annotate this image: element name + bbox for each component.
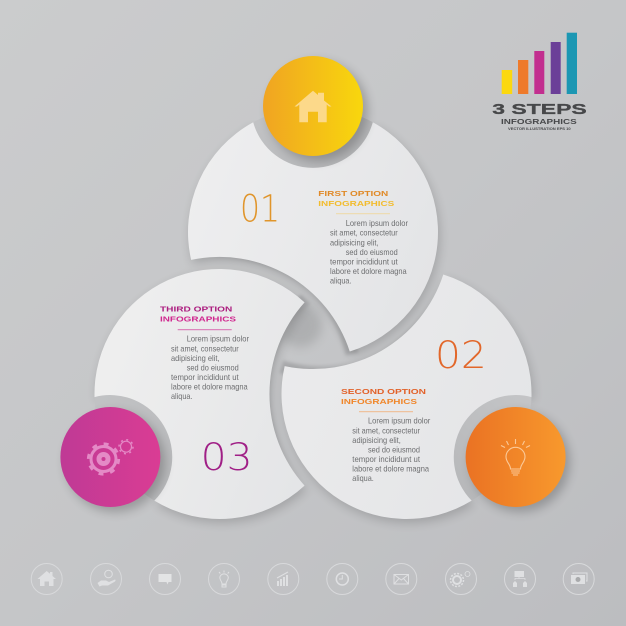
body text: tempor incididunt ut xyxy=(352,455,421,464)
orange circle with light bulb icon xyxy=(466,407,566,507)
heading xyxy=(318,189,394,208)
body text: Lorem ipsum dolor xyxy=(368,417,431,426)
number 02: 02 xyxy=(435,334,487,377)
yellow circle with home icon xyxy=(263,56,363,156)
body text: labore et dolore magna xyxy=(352,465,429,474)
heading: SECOND OPTION xyxy=(341,387,426,396)
divider xyxy=(336,213,390,214)
icon: envelope xyxy=(386,564,417,594)
heading xyxy=(160,305,236,324)
icon: banknotes xyxy=(563,564,594,594)
segment drop shadows xyxy=(64,126,566,561)
icon: home xyxy=(31,564,62,594)
logo: 3 steps xyxy=(492,33,587,131)
notch shading xyxy=(97,395,168,500)
logo subtitle: INFOGRAPHICS xyxy=(501,117,577,126)
body text: sit amet, consectetur xyxy=(330,229,398,238)
centre shading xyxy=(278,303,322,347)
body text xyxy=(330,219,408,286)
circle shadows xyxy=(65,61,570,512)
body text: tempor incididunt ut xyxy=(330,258,398,266)
body text: sed do eiusmod xyxy=(346,248,398,257)
icon: light bulb xyxy=(208,564,240,594)
icon: home xyxy=(294,91,332,122)
body text: aliqua. xyxy=(330,276,352,286)
divider xyxy=(178,329,232,330)
body text: labore et dolore magna xyxy=(330,267,407,276)
heading: INFOGRAPHICS xyxy=(160,315,236,324)
icon: light bulb xyxy=(501,439,530,475)
notch shading xyxy=(258,117,372,168)
body text: adipisicing elit, xyxy=(330,238,378,247)
icon: hand with coin xyxy=(90,564,122,594)
body text xyxy=(171,335,249,401)
body text: aliqua. xyxy=(352,474,374,483)
body text: labore et dolore magna xyxy=(171,383,248,392)
icon: rising chart xyxy=(268,564,299,594)
logo title: 3 STEPS xyxy=(492,101,587,118)
icon: gears xyxy=(446,564,476,594)
body text: sit amet, consectetur xyxy=(352,426,420,435)
heading: INFOGRAPHICS xyxy=(318,199,394,208)
body text: Lorem ipsum dolor xyxy=(187,335,249,344)
icon: gears xyxy=(88,440,133,474)
segment shape xyxy=(62,226,385,557)
panel: step 03 xyxy=(94,269,304,519)
heading: INFOGRAPHICS xyxy=(341,397,417,406)
body text: tempor incididunt ut xyxy=(171,373,239,382)
heading xyxy=(341,387,426,406)
magenta circle with gears icon xyxy=(60,407,160,507)
icon: clock xyxy=(327,564,358,594)
segment shape xyxy=(241,226,564,557)
notch shading xyxy=(454,395,532,496)
body text: sit amet, consectetur xyxy=(171,344,239,353)
logo caption: VECTOR ILLUSTRATION EPS 10 xyxy=(508,127,571,131)
body text: Lorem ipsum dolor xyxy=(346,219,408,228)
bar chart xyxy=(502,33,577,94)
heading: THIRD OPTION xyxy=(160,305,232,314)
heading: FIRST OPTION xyxy=(318,189,388,198)
body text: sed do eiusmod xyxy=(368,446,420,455)
segment shape xyxy=(188,122,438,352)
panel: step 01 xyxy=(188,117,438,352)
body text: aliqua. xyxy=(171,392,192,401)
icon: speech bubble xyxy=(150,564,180,594)
number 01: 01 xyxy=(240,188,280,230)
body text: sed do eiusmod xyxy=(187,364,239,373)
icon: people and chart xyxy=(504,564,536,594)
panel: step 02 xyxy=(282,274,532,519)
body text xyxy=(352,417,431,483)
body text: adipisicing elit, xyxy=(352,436,401,445)
divider xyxy=(359,411,413,412)
number 03: 03 xyxy=(201,436,253,479)
body text: adipisicing elit, xyxy=(171,354,220,363)
icon row xyxy=(31,564,594,594)
gap shading between the segments xyxy=(191,227,450,489)
